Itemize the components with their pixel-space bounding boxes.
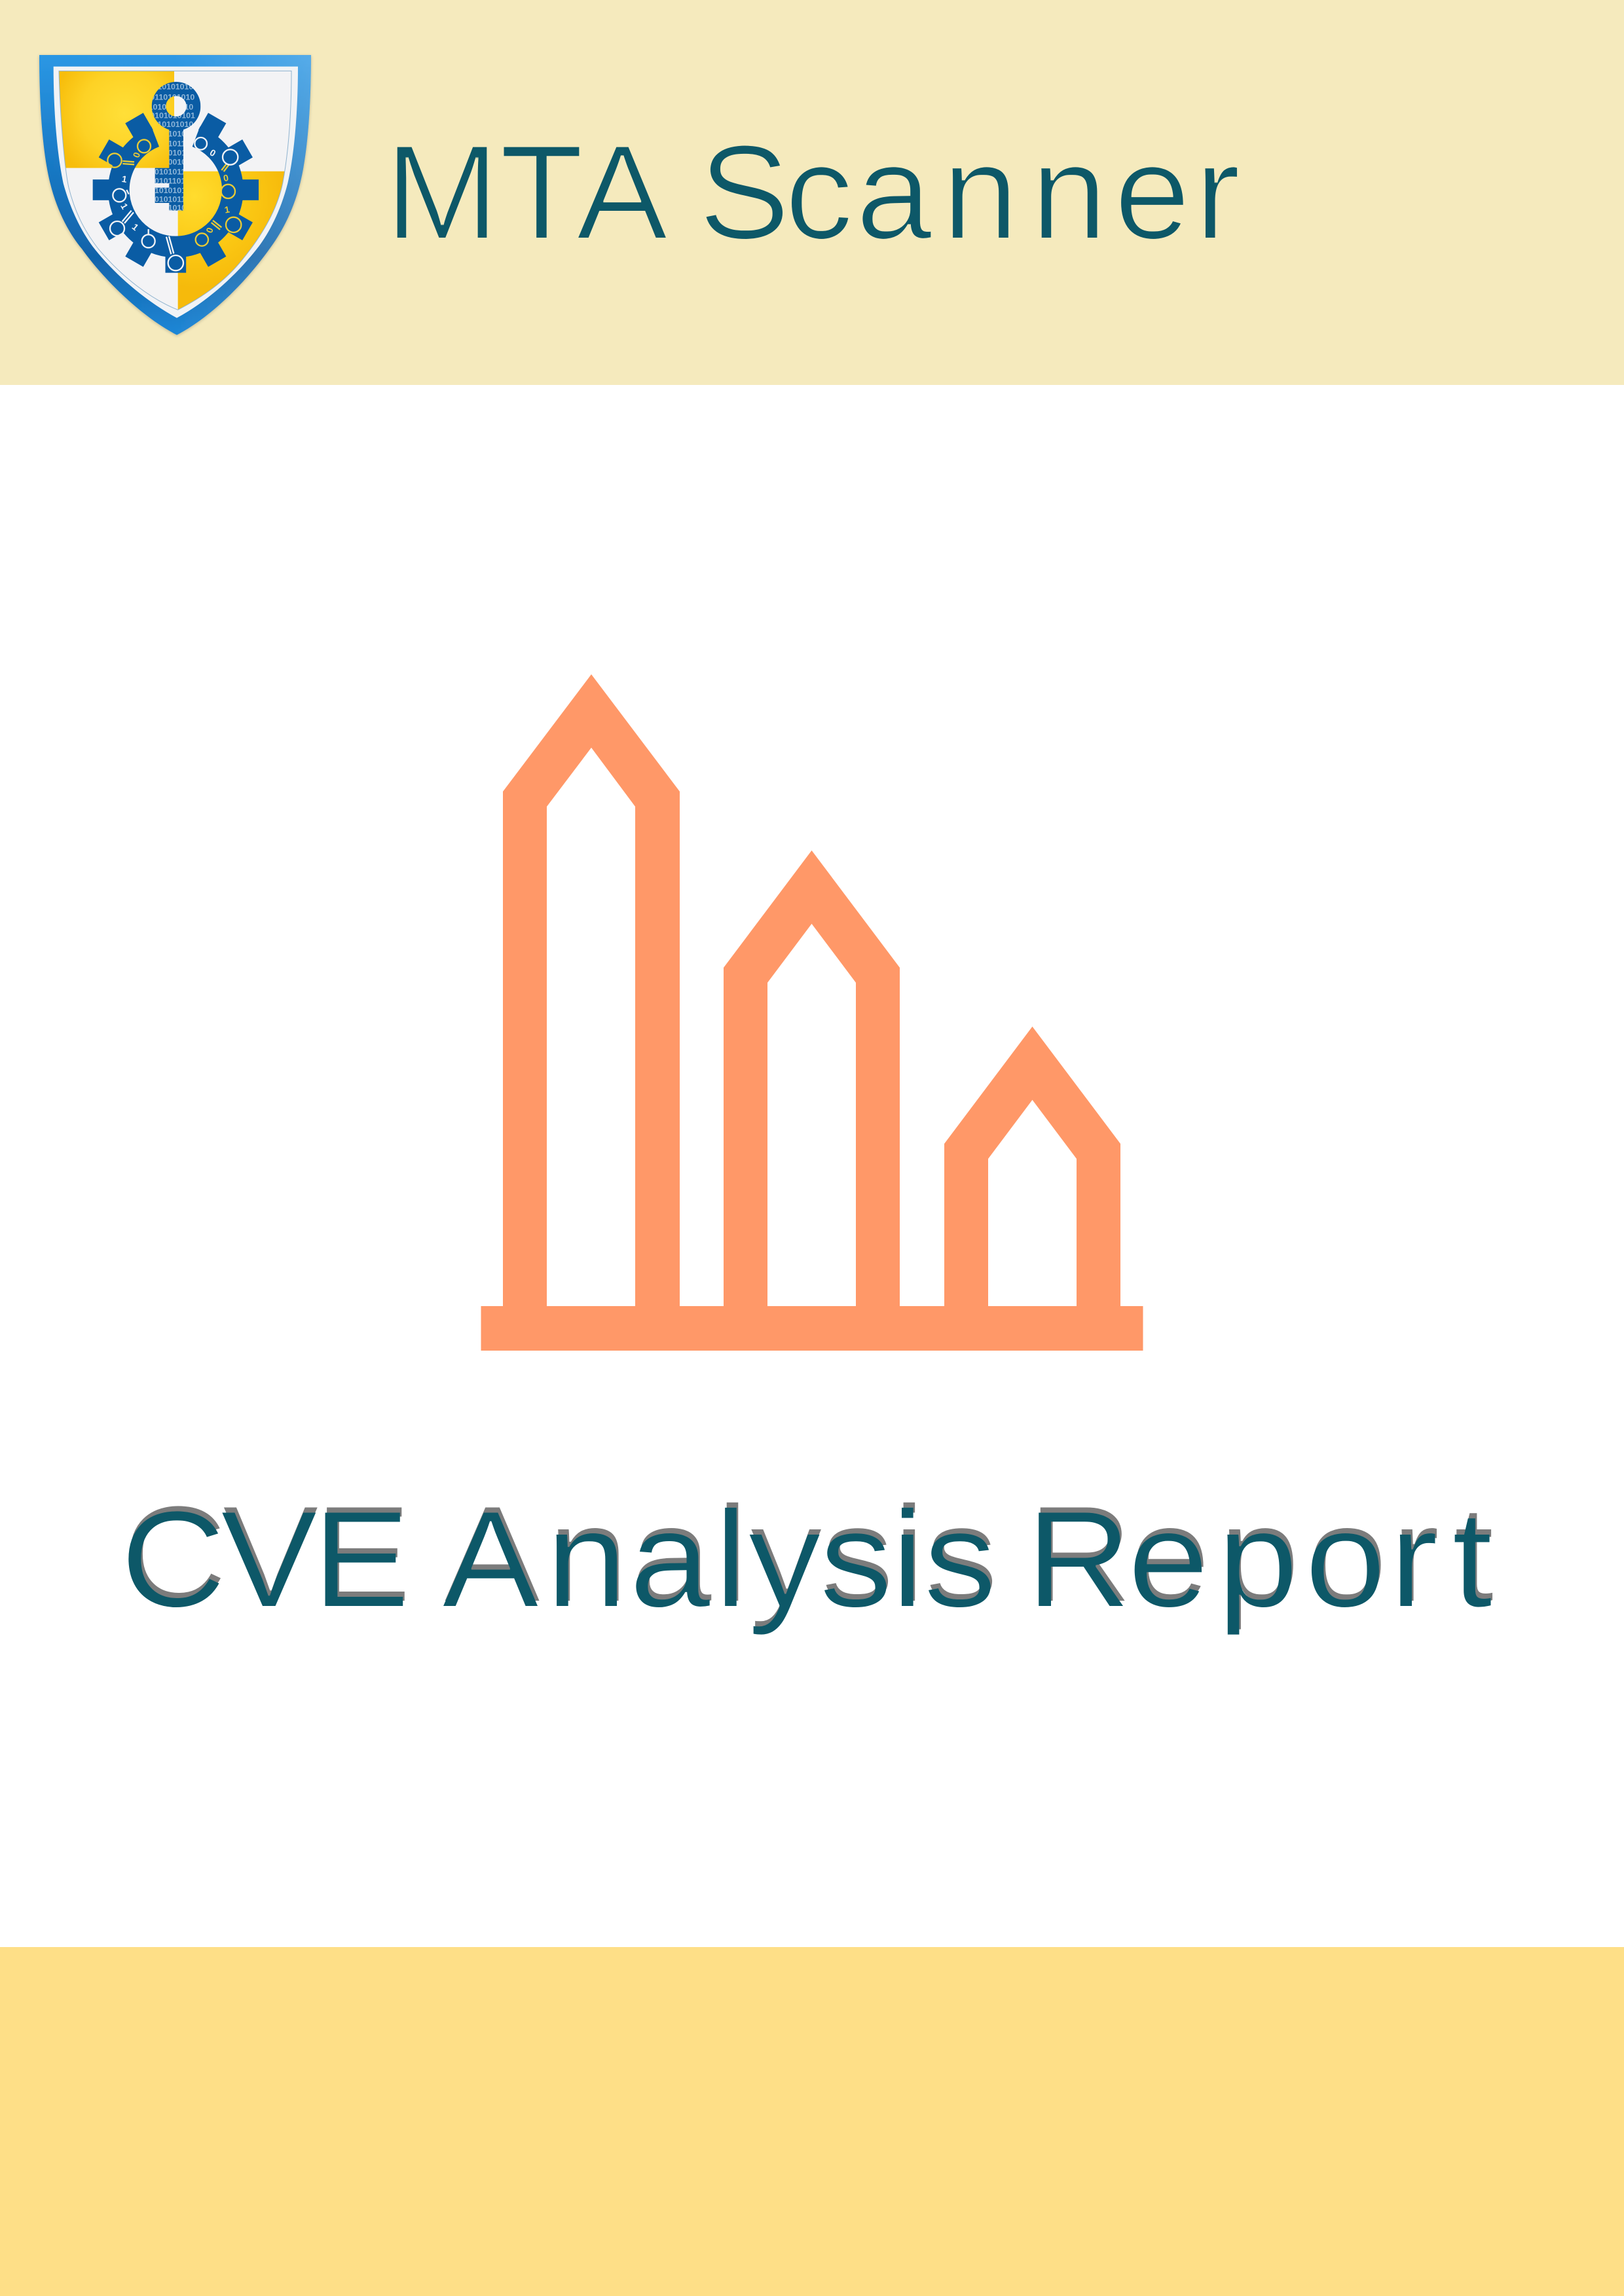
column 3 [944,1027,1120,1309]
key with binary pattern: 1010101010 [149,82,193,92]
report title with offset shadow [120,1477,1494,1636]
key with binary pattern [152,82,200,211]
header title: MTA Scanner: MTA Scanner [385,118,1240,266]
gear binary digits: 1 [119,202,130,211]
gear binary digits: 1 [223,204,231,215]
gear circuit nodes [107,137,241,270]
column 2 [724,850,900,1309]
key with binary pattern: 1011 [168,139,186,148]
key with binary pattern: 0110101010 [150,93,194,102]
gear binary digits [119,147,231,234]
key with binary pattern: 0101 [168,149,186,158]
column 1 [503,674,680,1309]
key with binary pattern: 0101101 [155,177,185,186]
gear binary digits: 0 [130,151,142,159]
chart baseline [481,1306,1143,1351]
gear [93,113,259,273]
key with binary pattern: 0101011 [155,168,185,177]
icon: MTA Scanner shield logo [39,55,311,335]
icon: bar chart with arrow-shaped columns [481,674,1143,1351]
gear binary digits: 0 [204,226,215,234]
header band [0,0,1624,385]
shield quartered field [59,71,284,310]
gear binary digits: 1 [130,221,141,232]
key with binary pattern: 0101010101 [150,111,195,120]
key with binary pattern: 1010 [168,204,186,213]
title text: CVE Analysis Report [120,1482,1492,1636]
key with binary pattern: 0101011 [155,194,185,204]
key with binary pattern: 1010101010 [149,120,193,129]
key with binary pattern: 1010101010 [149,102,193,111]
gear binary digits: 0 [208,147,218,158]
title shadow: CVE Analysis Report [122,1477,1494,1631]
gear binary digits: 1 [121,173,128,185]
key with binary pattern: 0010 [168,158,186,167]
key with binary pattern: 1010 [168,129,186,138]
gear binary digits: 0 [223,172,229,183]
key with binary pattern: 1010101 [155,186,186,195]
shield field outline [59,71,291,310]
shield outer blue rim [39,55,311,335]
footer band [0,1947,1624,2296]
shield inner white rim [54,67,298,318]
